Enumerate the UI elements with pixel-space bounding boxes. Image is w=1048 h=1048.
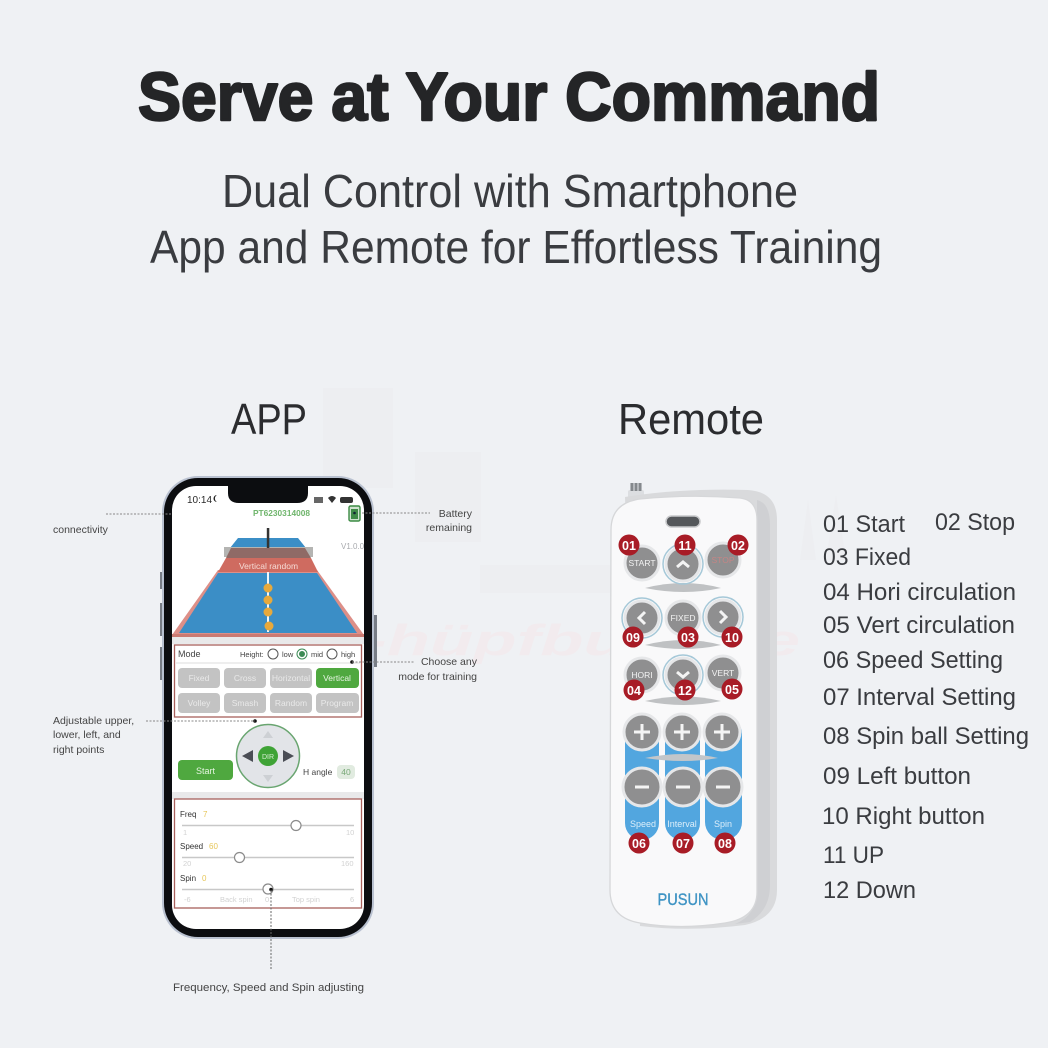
- panel: mode selector: Height:: [240, 650, 264, 659]
- number badges: 10: [725, 631, 739, 645]
- number badges: 12: [678, 684, 692, 698]
- panel: sliders: 7: [203, 810, 208, 819]
- callout: battery remaining: Battery: [439, 508, 473, 520]
- callout: connectivity: connectivity: [53, 524, 109, 536]
- number badges: 06: [632, 837, 646, 851]
- legend: button list: 07 Interval Setting: [823, 684, 1016, 711]
- icon: phone body: [160, 476, 377, 939]
- subtitle: App and Remote for Effortless Training: [150, 221, 882, 273]
- panel: mode selector: [174, 645, 362, 717]
- status bar: 10:14: [187, 495, 212, 506]
- legend: button list: 01 Start: [823, 511, 905, 538]
- buttons: [623, 543, 742, 806]
- heading: Remote: Remote: [618, 395, 764, 444]
- panel: mode selector: Random: [275, 698, 307, 708]
- callout: frequency speed spin: Frequency, Speed and Spin adjusting: [173, 982, 364, 994]
- number badges: 03: [681, 631, 695, 645]
- panel: sliders: 0: [265, 895, 269, 904]
- panel: sliders: 160: [341, 859, 354, 868]
- button labels: Spin: [714, 819, 732, 829]
- legend: button list: 09 Left button: [823, 763, 971, 790]
- panel: mode selector: Vertical: [323, 673, 351, 683]
- version label: V1.0.0: [341, 542, 365, 551]
- callout: mode for training: [352, 656, 478, 683]
- remote body: [610, 490, 777, 929]
- button labels: STOP: [712, 555, 735, 565]
- callout: battery remaining: remaining: [426, 522, 472, 534]
- title: Serve at Your Command: [138, 59, 880, 135]
- panel: direction control: Start: [196, 766, 215, 776]
- legend: button list: [822, 509, 1029, 904]
- table diagram: Vertical random: [239, 561, 298, 571]
- number badges: 04: [627, 684, 641, 698]
- number badges: 01: [622, 539, 636, 553]
- button labels: HORI: [631, 670, 653, 680]
- panel: mode selector: Horizontal: [272, 673, 310, 683]
- legend: button list: 06 Speed Setting: [823, 647, 1003, 674]
- number badges: [618, 534, 748, 854]
- button labels: START: [628, 558, 656, 568]
- device id: PT6230314008: [253, 508, 310, 518]
- legend: button list: 08 Spin ball Setting: [823, 723, 1029, 750]
- text: bonn-hüpfburg.de: [190, 616, 800, 665]
- button rings: [622, 544, 743, 695]
- legend: button list: 11 UP: [823, 842, 884, 869]
- panel: direction control: H angle: [303, 767, 333, 777]
- subtitle: [150, 165, 882, 273]
- panel: mode selector: Smash: [232, 698, 258, 708]
- heading: APP: APP: [231, 395, 307, 444]
- panel: mode selector: mid: [311, 650, 323, 659]
- panel: sliders: 1: [183, 828, 187, 837]
- icon: battery: [349, 506, 360, 521]
- panel: sliders: -6: [184, 895, 191, 904]
- panel: direction control: DIR: [262, 754, 274, 761]
- callout: mode for training: mode for training: [398, 671, 477, 683]
- panel: sliders: 60: [209, 842, 218, 851]
- panel: sliders: Spin: [180, 874, 196, 883]
- icon: antenna: [628, 483, 644, 500]
- panel: direction control: [178, 719, 355, 788]
- panel: sliders: Top spin: [292, 895, 320, 904]
- button labels: Interval: [667, 819, 697, 829]
- number badges: 08: [718, 837, 732, 851]
- panel: sliders: Speed: [180, 842, 203, 851]
- panel: sliders: [174, 799, 362, 908]
- panel: sliders: 6: [350, 895, 354, 904]
- subtitle: Dual Control with Smartphone: [222, 165, 798, 217]
- panel: mode selector: low: [282, 650, 294, 659]
- legend: button list: 12 Down: [823, 877, 916, 904]
- callout: adjustable points: [53, 715, 255, 756]
- number badges: 05: [725, 683, 739, 697]
- panel: mode selector: Cross: [234, 673, 256, 683]
- callout: battery remaining: [362, 508, 473, 534]
- status bar: [187, 495, 353, 506]
- button labels: VERT: [712, 668, 734, 678]
- button labels: [628, 555, 735, 829]
- legend: button list: 04 Hori circulation: [823, 579, 1016, 606]
- panel: phone app: [160, 476, 377, 939]
- callout: adjustable points: Adjustable upper,: [53, 715, 134, 727]
- panel: direction control: 40: [341, 767, 351, 777]
- button labels: Speed: [630, 819, 656, 829]
- callout: adjustable points: right points: [53, 744, 104, 756]
- panel: sliders: 0: [202, 874, 207, 883]
- panel: sliders: Back spin: [220, 895, 253, 904]
- panel: remote control: [610, 483, 777, 929]
- number badges: 07: [676, 837, 690, 851]
- panel: mode selector: Fixed: [189, 673, 210, 683]
- control pills: [625, 716, 742, 840]
- legend: button list: 02 Stop: [935, 509, 1015, 536]
- legend: button list: 03 Fixed: [823, 544, 911, 571]
- panel: mode selector: Mode: [178, 649, 201, 659]
- callout: mode for training: Choose any: [421, 656, 478, 668]
- panel: mode selector: Volley: [188, 698, 211, 708]
- number badges: 09: [626, 631, 640, 645]
- panel: sliders: 20: [183, 859, 191, 868]
- number badges: 11: [678, 539, 692, 553]
- panel: sliders: 10: [346, 828, 354, 837]
- callout: connectivity: [53, 514, 172, 536]
- number badges: 02: [731, 539, 745, 553]
- panel: mode selector: Program: [321, 698, 353, 708]
- panel: mode selector: high: [341, 650, 355, 659]
- callout: adjustable points: lower, left, and: [53, 729, 121, 741]
- button labels: FIXED: [670, 613, 696, 623]
- legend: button list: 05 Vert circulation: [823, 612, 1015, 639]
- panel: sliders: Freq: [180, 810, 196, 819]
- logo: PUSUN: [658, 890, 708, 909]
- legend: button list: 10 Right button: [822, 803, 985, 830]
- table diagram: [172, 528, 364, 799]
